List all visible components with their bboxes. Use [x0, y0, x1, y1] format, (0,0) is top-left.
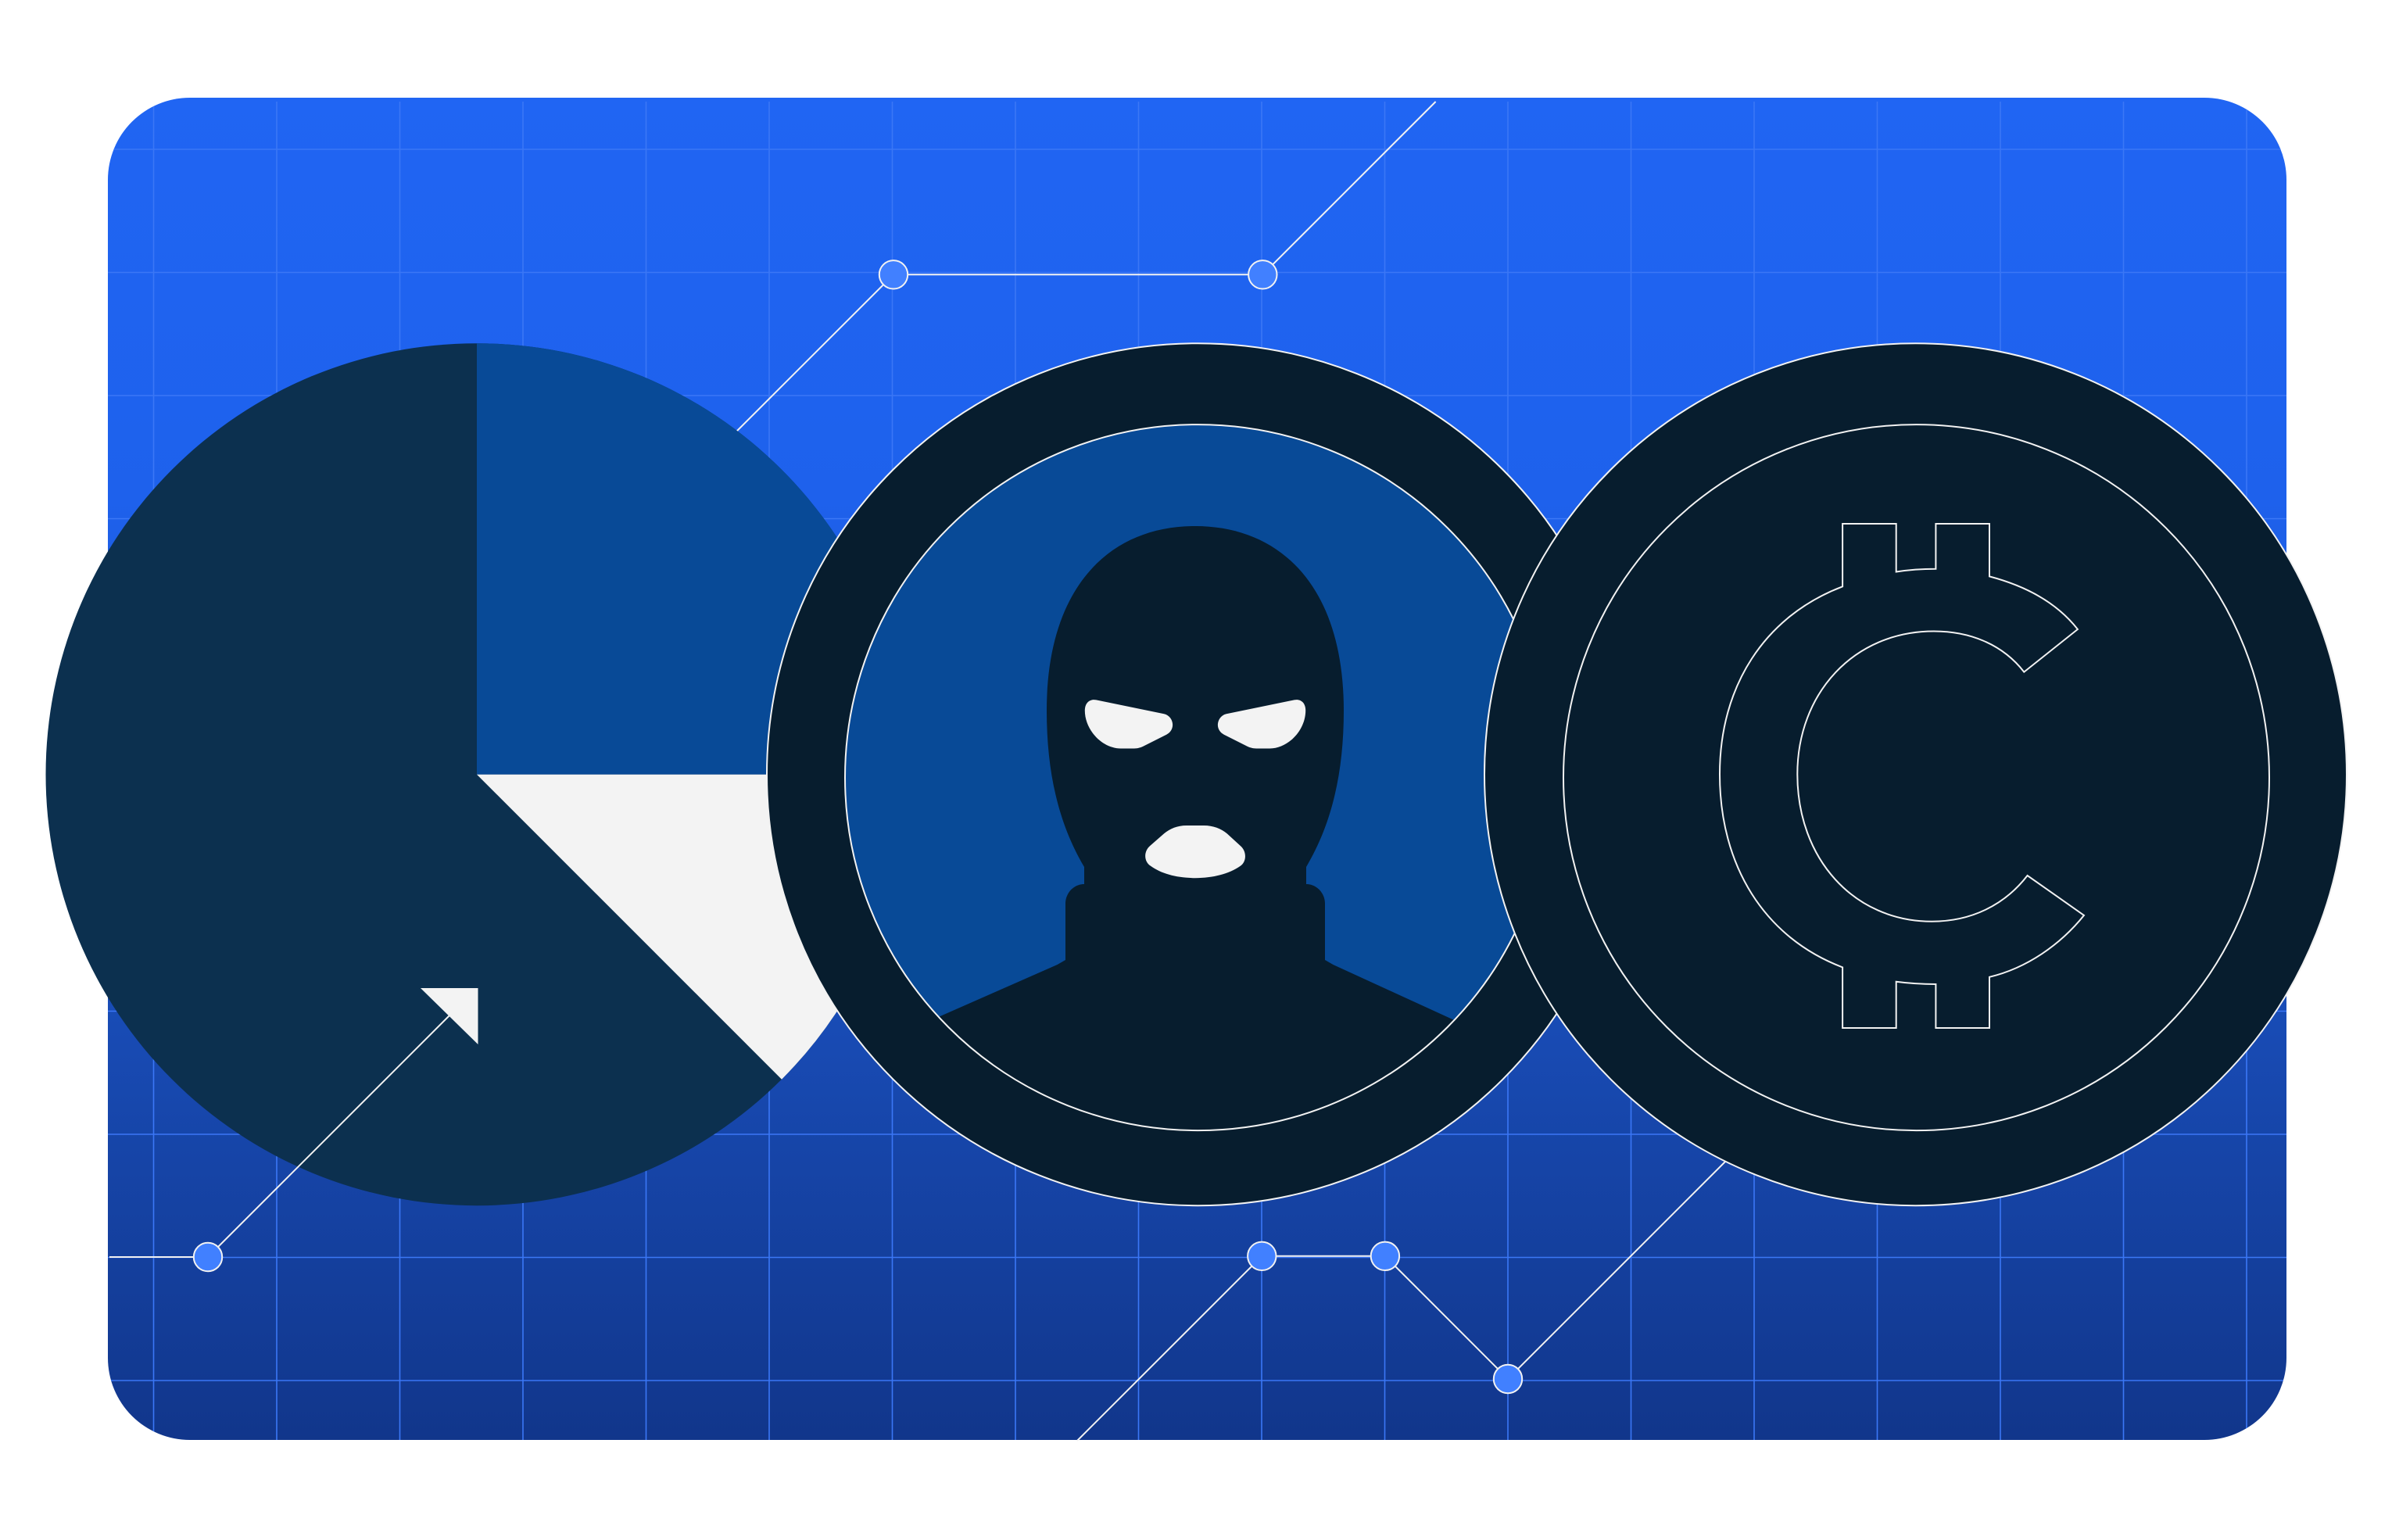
data point: upper right: [1248, 260, 1277, 288]
pie slice: blue quarter: [477, 343, 908, 775]
inner blue disc: [845, 424, 1551, 1130]
icon: balaclava figure: [940, 526, 1454, 1130]
icon: cryptocurrency symbol outline: [1720, 524, 2084, 1028]
pie chart: [45, 343, 908, 1205]
data point: lower second: [1371, 1242, 1399, 1270]
data point: arrow start: [194, 1243, 222, 1271]
icon: left eye hole: [1085, 700, 1173, 749]
pie slice: white: [477, 775, 908, 1080]
data point: lower first: [1248, 1242, 1277, 1270]
data point: upper left: [879, 260, 908, 288]
panel: blue grid background: [108, 98, 2286, 1440]
data point: lower third: [1494, 1365, 1522, 1393]
arrowhead: [421, 988, 478, 1044]
line chart: lower trend line: [1077, 1136, 1751, 1441]
line chart: upper trend line: [704, 102, 1436, 464]
panel: crypto coin: [1484, 343, 2347, 1205]
inner ring: [1563, 424, 2269, 1130]
icon: right eye hole: [1218, 700, 1305, 749]
arrow: trend arrow over pie: [109, 988, 478, 1271]
panel: masked thief coin: [767, 343, 1629, 1205]
icon: mouth hole: [1145, 826, 1245, 878]
inner ring: [845, 424, 1551, 1130]
